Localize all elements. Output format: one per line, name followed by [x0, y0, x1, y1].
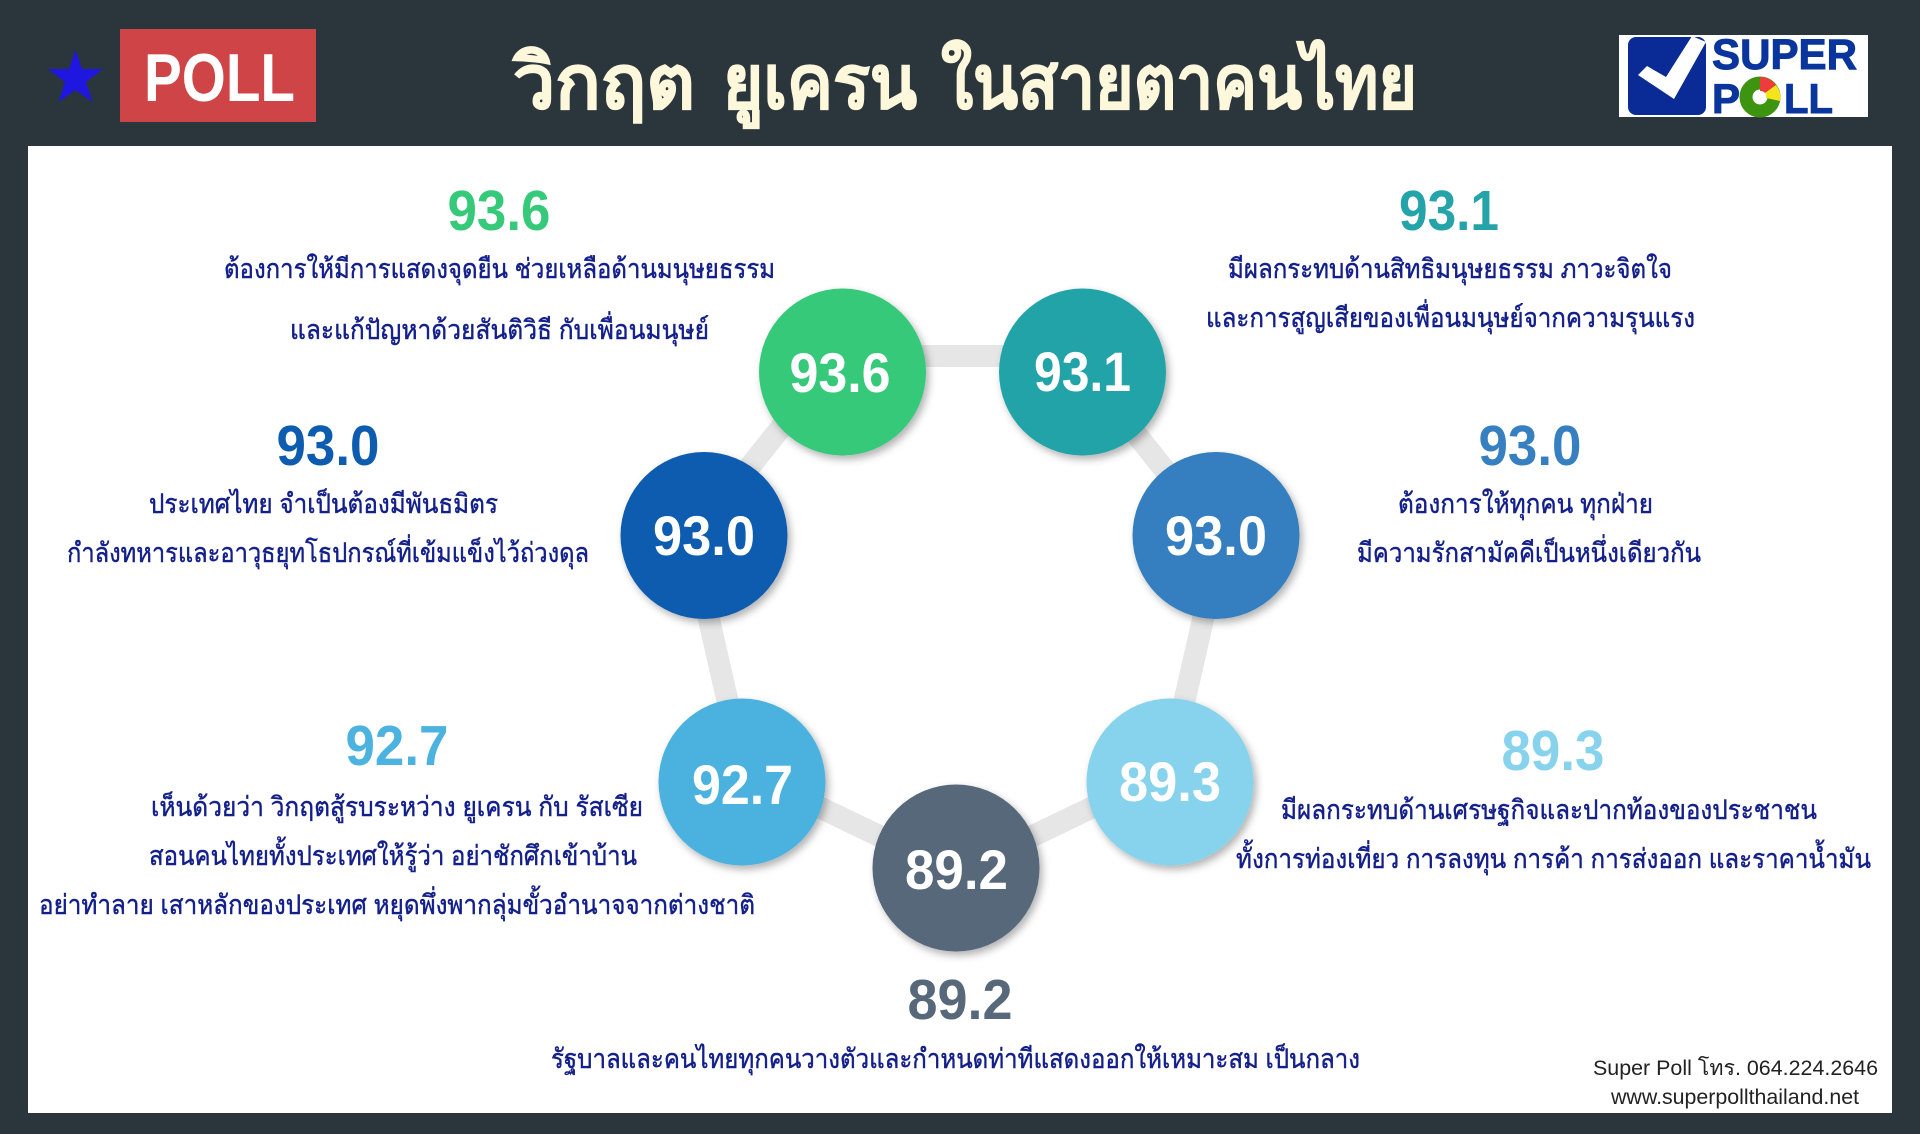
footer: contact — [1593, 1056, 1878, 1109]
value: 93.6 — [448, 179, 550, 243]
node: 93.1 — [999, 288, 1166, 456]
icon: star — [48, 50, 103, 102]
description: และการสูญเสียของเพื่อนมนุษย์จากความรุนแรง — [1206, 299, 1695, 335]
node: 93.0 left: 93.0 — [653, 504, 755, 567]
node: 93.6: 93.6 — [790, 341, 890, 404]
node: 93.6 — [759, 288, 926, 456]
footer: contact: www.superpollthailand.net — [1610, 1086, 1859, 1109]
callout: 92.7 — [39, 714, 755, 922]
value: 93.1 — [1399, 179, 1499, 243]
value: 92.7 — [346, 714, 448, 778]
description: และแก้ปัญหาด้วยสันติวิธี กับเพื่อนมนุษย์ — [290, 311, 709, 347]
node: 93.0 left — [620, 452, 788, 619]
callout: 93.1 — [1206, 179, 1695, 335]
description — [1206, 253, 1695, 335]
description: รัฐบาลและคนไทยทุกคนวางตัวและกำหนดท่าทีแสดงออกให้เหมาะสม เป็นกลาง — [551, 1041, 1360, 1076]
callout: 89.2 — [551, 968, 1360, 1076]
node: 89.2 — [872, 784, 1040, 952]
node: 89.3 — [1086, 698, 1254, 866]
node: 92.7: 92.7 — [692, 753, 793, 816]
callout: 89.3 — [1236, 719, 1871, 876]
node: 92.7 — [658, 698, 826, 866]
description — [224, 253, 775, 347]
description: กำลังทหารและอาวุธยุทโธปกรณ์ที่เข้มแข็งไว้ถ่วงดุล — [67, 534, 589, 570]
chart: heptagon connector ring — [691, 356, 1221, 873]
description — [1236, 795, 1871, 876]
value: 93.0 — [276, 414, 380, 478]
value: 89.3 — [1502, 719, 1604, 783]
node: 93.0 right — [1132, 452, 1300, 619]
description: มีผลกระทบด้านสิทธิมนุษยธรรม ภาวะจิตใจ — [1228, 253, 1672, 286]
title: วิกฤต — [512, 40, 695, 124]
logo: Super Poll: LL — [1784, 75, 1833, 122]
logo: Super Poll: P — [1712, 75, 1740, 122]
badge: POLL — [120, 29, 316, 122]
node: 89.2: 89.2 — [905, 838, 1008, 901]
title: ในสายตาคนไทย — [941, 38, 1417, 124]
callout: 93.0 left — [67, 414, 589, 570]
description: ต้องการให้ทุกคน ทุกฝ่าย — [1398, 488, 1653, 521]
description: มีความรักสามัคคีเป็นหนึ่งเดียวกัน — [1357, 534, 1701, 568]
logo: Super Poll — [1619, 31, 1868, 122]
callout: 93.0 right — [1357, 414, 1701, 568]
title: ยูเครน — [723, 40, 917, 129]
description: ต้องการให้มีการแสดงจุดยืน ช่วยเหลือด้านมนุษยธรรม — [224, 253, 775, 286]
node: 93.0 right: 93.0 — [1165, 504, 1267, 567]
description: เห็นด้วยว่า วิกฤตสู้รบระหว่าง ยูเครน กับ รัสเซีย — [151, 789, 643, 823]
footer: contact: Super Poll โทร. 064.224.2646 — [1593, 1056, 1878, 1080]
description: ประเทศไทย จำเป็นต้องมีพันธมิตร — [149, 486, 498, 519]
node: 89.3: 89.3 — [1119, 750, 1221, 813]
description — [39, 789, 755, 922]
description — [1357, 488, 1701, 568]
value: 89.2 — [908, 968, 1012, 1032]
badge: POLL: POLL — [144, 40, 295, 116]
value: 93.0 — [1478, 414, 1582, 478]
node: 93.1: 93.1 — [1034, 340, 1131, 403]
title — [512, 38, 1417, 129]
description — [67, 486, 589, 570]
callout: 93.6 — [224, 179, 775, 347]
description: มีผลกระทบด้านเศรษฐกิจและปากท้องของประชาชน — [1281, 795, 1817, 826]
logo: Super Poll: SUPER — [1712, 31, 1857, 79]
description: สอนคนไทยทั้งประเทศให้รู้ว่า อย่าชักศึกเข้าบ้าน — [149, 836, 637, 872]
description: อย่าทำลาย เสาหลักของประเทศ หยุดพึ่งพากลุ่มขั้วอำนาจจากต่างชาติ — [39, 885, 755, 922]
